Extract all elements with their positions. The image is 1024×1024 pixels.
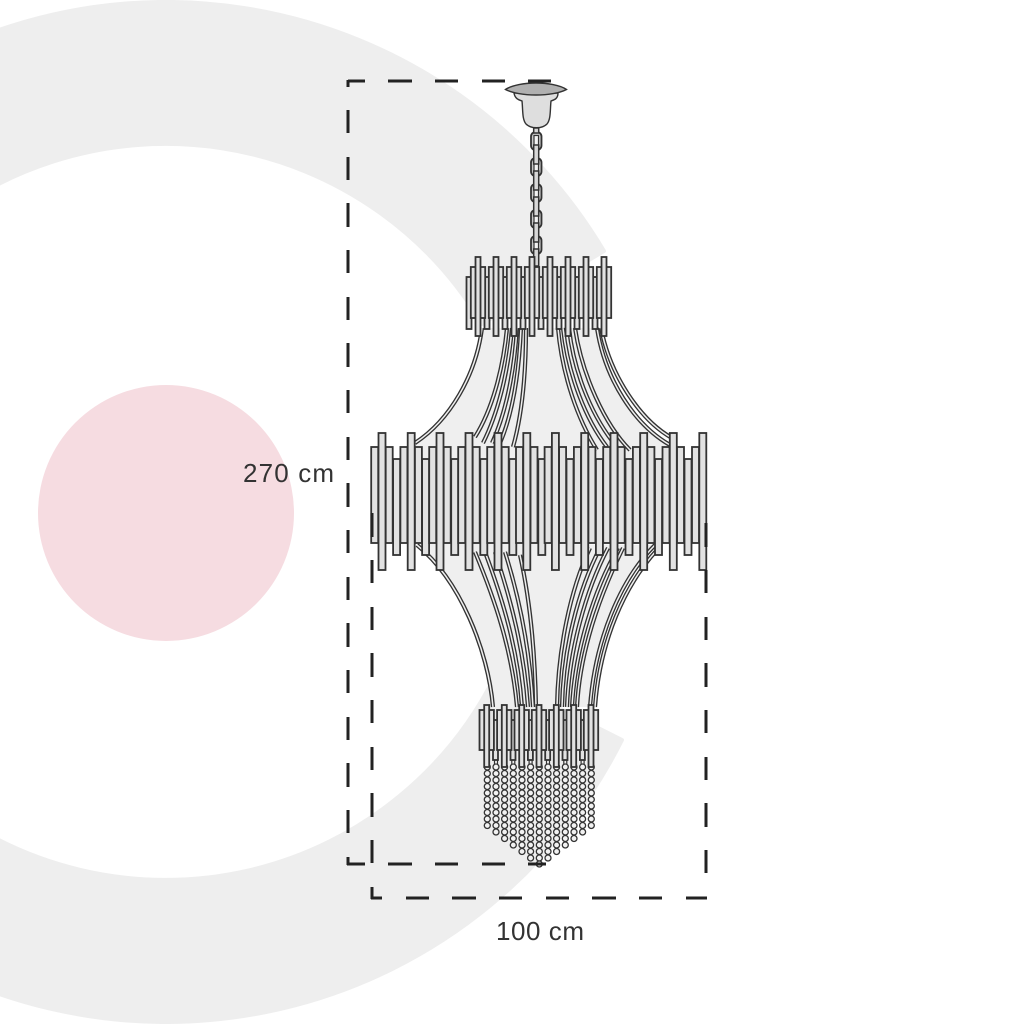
ceiling canopy xyxy=(506,83,566,128)
height dashed bracket xyxy=(347,80,551,865)
chain xyxy=(531,128,542,266)
bottom band of crystal bars xyxy=(480,705,598,767)
top band of crystal bars xyxy=(466,257,611,336)
middle band of crystal bars xyxy=(371,433,706,570)
height label: 270 cm xyxy=(243,458,334,488)
hanging beads xyxy=(484,750,594,867)
width dashed bracket xyxy=(371,513,707,899)
background ring xyxy=(0,2,622,1022)
width label: 100 cm xyxy=(496,916,584,946)
pink circle xyxy=(38,385,294,641)
curved arms xyxy=(415,328,672,707)
chandelier xyxy=(371,83,706,867)
chandelier body fill xyxy=(415,328,670,707)
